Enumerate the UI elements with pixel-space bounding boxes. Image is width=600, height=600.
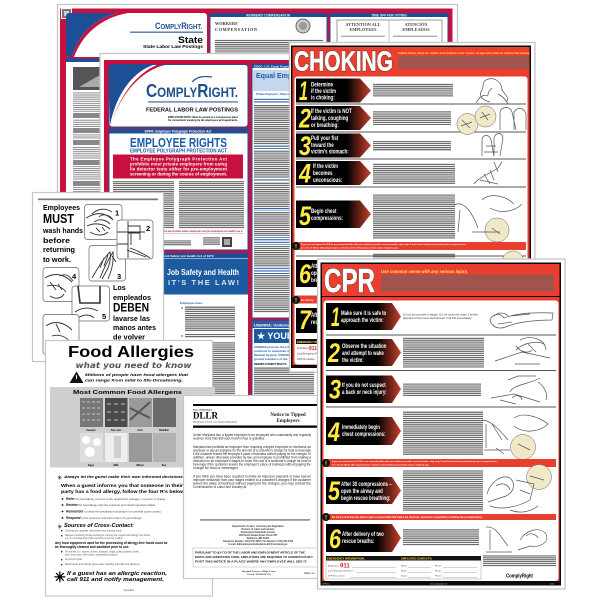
choking step 3: Pull your fist [311, 135, 338, 142]
notice body: employer or pay an assignee for the amount of a customer's charge for food or beverage [193, 448, 311, 452]
CPR emergency information: 911 [340, 564, 350, 570]
poster: employees must wash hands [32, 192, 164, 362]
department contact: Department of Labor, Licensing and Regulation [232, 525, 284, 528]
State left column [66, 58, 106, 194]
Workers' compensation panel [210, 13, 327, 134]
posting requirement box [193, 548, 328, 567]
Equal employment panel: EEOC: U.S. Equal Employment [254, 64, 298, 68]
department contact [223, 525, 294, 546]
cross-contact section: Wash hands and change gloves after handling potential food allergens. [65, 563, 140, 566]
Time off for voting panel: EMPLOYEES [350, 27, 377, 32]
CPR emergency information: Phone: [435, 566, 442, 568]
CPR step dividers [326, 335, 556, 407]
notice body: Under Maryland law, a tipped employee is an employee who customarily and regularly [193, 433, 311, 437]
choking intro [398, 51, 530, 69]
USERRA panel: Medical System, USERRA also [254, 353, 298, 357]
State header panel: COMPLYRIGHT. [155, 21, 202, 31]
Equal employment panel [252, 64, 342, 318]
notice title [270, 413, 306, 424]
cross-contact section: be thoroughly cleaned and sanitized prior to use. [55, 545, 129, 549]
poster: CPR [318, 259, 565, 589]
Spanish notice text: empleados [113, 293, 151, 302]
EPPA QR code [222, 237, 232, 247]
choking emergency info: Ambulance: [297, 347, 309, 350]
allergen photos [80, 398, 176, 462]
Time off for voting panel: ATENCIÓN [405, 22, 428, 27]
wash step 1 [84, 204, 122, 240]
CPR emergency information: Local Emergency Phone #: [328, 570, 355, 572]
English notice text: returning [43, 245, 75, 254]
cross-contact section: Fryers and grills. [65, 558, 83, 561]
guest guidance: When a guest informs you that someone in their [61, 483, 183, 489]
Time off for voting panel [330, 13, 448, 134]
choking step 5: Begin chest [311, 208, 337, 215]
Job safety and health panel: IT'S THE LAW! [168, 278, 239, 287]
cross-contact section: All utensils (i.e. spoons, knives, spatulas, tongs, cutting boards, bowls, [65, 550, 140, 554]
CPR step 1: 1 [331, 302, 340, 332]
notice body: addition, unless otherwise provided by law, and employer is prohibited from making a [193, 456, 311, 460]
choking warning bar: at a rate of 100 to 120 compressions a minute until an 911 person arrives and is ready for you. [301, 246, 399, 250]
Spanish notice text: manos antes [113, 323, 156, 332]
poster: food allergies [46, 340, 215, 596]
cross-contact section: Any food equipment used for the processing of allergy-free foods must be [55, 541, 168, 545]
emergency callout [54, 569, 167, 585]
choking second warning: Do not try [301, 298, 314, 302]
department contact: E-mail: dldliemploymentstandards-dllr@maryland.gov [228, 543, 288, 546]
allergen labels: Milk [114, 464, 119, 467]
allergen labels: Shellfish [159, 429, 170, 432]
notice footer: Maryland Division of Wage & Hour [242, 570, 276, 573]
cross-contact section: Allergen-containing foods touching or coming into contact with allergy-free foods [65, 534, 151, 537]
department contact: Employment Standards Service [241, 531, 276, 534]
choking step 2: 2 [298, 104, 311, 134]
cross-contact section: Sources of Cross-Contact: [64, 523, 134, 529]
notice title: Employers [276, 419, 300, 424]
choking second warning: ! [295, 298, 297, 304]
choking emergency info: EMERGENCY INFORMATION: [297, 340, 333, 344]
allergen labels: Soy [162, 464, 167, 467]
choking step 6: breaths [311, 277, 327, 284]
CPR footer [322, 582, 554, 586]
CPR step 3: 3 [329, 374, 341, 404]
CPR footer: www.complyright.com [430, 582, 448, 586]
CPR step 3: a back or neck injury: [342, 389, 387, 396]
poster: State Labor Law Postings [58, 4, 458, 194]
most common allergens panel: Most Common Food Allergens [73, 390, 182, 396]
poster: notice to tipped employers [184, 396, 328, 578]
guest guidance [57, 474, 186, 495]
Equal employment panel: Equal Employment [256, 73, 320, 80]
four R's list: Review the food allergy with the customer and check ingredient labels. [66, 503, 156, 507]
wash step 1: 1 [115, 208, 119, 218]
CPR step 2: the victim: [342, 357, 364, 364]
subtitle: what you need to know [76, 361, 192, 370]
cross-contact section: Cooking oils, spatulas, and steam from cooking foods. [65, 530, 123, 532]
EPPA employee rights panel: EMPLOYEE RIGHTS [130, 135, 227, 150]
CPR step 5: 5 [328, 476, 341, 506]
posting requirement box: PURSUANT TO §3-713 OF THE LABOR AND EMPLOYMENT ARTICLE OF THE [195, 550, 305, 554]
choking step 7: rescue [311, 319, 326, 326]
emergency callout: ✳ [54, 569, 66, 585]
poster: choking [290, 42, 535, 372]
CPR step 2: Observe the situation [342, 343, 386, 350]
CPR ComplyRight logo: ComplyRight [506, 574, 533, 580]
allergen labels: Peanuts [86, 429, 96, 432]
CPR step 6: rescue breaths: [342, 538, 375, 545]
Time off for voting panel: TIME OFF FOR VOTING [371, 14, 407, 18]
choking step 3: victim's stomach: [311, 149, 349, 156]
department contact: Telephone Number: (410) 767-2357 | Fax Number: (410) 333-7303 [223, 540, 294, 543]
CPR warning bar 2: ! [325, 516, 327, 522]
CPR footer: 1234 [550, 584, 554, 586]
CPR step 4: Immediately begin [342, 424, 380, 431]
USERRA panel: positions to undertake military [254, 349, 298, 353]
State header panel: State [178, 35, 203, 45]
choking warning bar: ! [295, 244, 297, 250]
Time off for voting panel: EMPLEADOS [402, 27, 430, 32]
wash step 3: 3 [117, 272, 121, 281]
choking step 2: If the victim is NOT [311, 108, 352, 115]
choking step 1: is choking: [311, 95, 335, 102]
CPR emergency information: EMPLOYEE CONTACTS: [401, 556, 432, 560]
USERRA panel: ★ YOUR RIGHTS [257, 331, 330, 341]
English notice text: Employees [43, 203, 80, 212]
CPR step 4: chest compressions: [342, 431, 386, 438]
warning [70, 372, 189, 383]
cross-contact section: (i.e. a nut-containing muffin touching a nut-free muffin). [65, 537, 123, 540]
notice title: Notice to Tipped [270, 413, 306, 418]
CPR step 4: 4 [327, 417, 340, 447]
EPPA employee rights panel [109, 129, 248, 250]
CPR step 6: After delivery of two [342, 531, 384, 538]
notice body: receives more than $30 each month in tips or gratuities. [193, 436, 265, 440]
CPR emergency information: Name: [401, 570, 408, 572]
cross-contact section: pots, food pans, sheet pans, preparation surfaces. [65, 554, 118, 556]
choking step 3 [296, 131, 503, 161]
CPR step 1: appears to have been electrocuted. Call 911 immediately. [403, 317, 472, 320]
CPR step 1: approach the victim: [341, 317, 384, 324]
CPR step 2: 2 [327, 338, 340, 368]
Spanish notice text: lavarse las [113, 314, 150, 323]
USERRA panel: USERRA protects the job rights [254, 345, 299, 349]
allergen labels: Wheat [136, 464, 144, 467]
CPR emergency information: CPR Kit Location: [328, 574, 346, 578]
choking step 4: 4 [298, 158, 311, 188]
wash step 2: 2 [146, 224, 150, 233]
guest guidance: party has a food allergy, follow the four R's below: [61, 489, 186, 495]
most common allergens panel [50, 387, 215, 468]
EPPA employee rights panel: The law protects where employees and job applicants can readily see it. [163, 229, 243, 233]
choking step 1: Determine [311, 82, 333, 89]
CPR step 2: and attempt to wake [342, 350, 384, 357]
CPR footer: CPR0001 [322, 584, 330, 586]
USERRA panel: ground members of the [254, 357, 288, 361]
Time off for voting panel: ATTENTION ALL [345, 22, 381, 27]
notice body: charge for food or beverages. [193, 466, 239, 470]
choking second warning [292, 296, 526, 304]
choking title: CHOKING [294, 46, 393, 76]
Job safety and health panel [163, 253, 248, 398]
CPR warning bar 1: at a rate of 100 to 120 compressions a minute until an 911 person arrives and is ready for you. [332, 464, 430, 466]
notice footer [242, 570, 315, 576]
Workers' compensation panel: WORKERS' [215, 21, 239, 26]
choking step 7: After [311, 312, 322, 319]
Spanish notice text: de volver [113, 332, 145, 342]
CPR title: CPR [324, 262, 375, 299]
CPR emergency information: EMERGENCY INFORMATION: [327, 556, 365, 560]
ComplyRight federal header: COMPLYRIGHT. [146, 81, 238, 101]
CPR emergency information: Ambulance: [328, 564, 340, 568]
Spanish notice text: DEBEN [113, 300, 149, 314]
notice body: if the customer leaves the employer's place of business without paying for the charges. In [193, 452, 311, 456]
emergency callout: call 911 and notify management. [67, 577, 164, 583]
notice body: If you think you have been required to make an improper payment or have had an [193, 474, 311, 478]
USERRA panel [252, 321, 342, 401]
CPR step 3 [326, 374, 547, 404]
ComplyRight federal header: for convenient viewing by all employees and applicants. [168, 119, 238, 122]
State QR code [61, 8, 72, 19]
notice body: Commissioner of Labor and Industry at: [193, 485, 247, 489]
EPPA employee rights panel: EPPA: Employee Polygraph Protection Act [145, 130, 212, 134]
wash step 2 [117, 220, 153, 259]
Job safety and health panel: Job Safety and Health [167, 267, 239, 277]
CPR emergency information: Phone: [435, 576, 442, 578]
ComplyRight federal header: EMPLOYERS NOTE: Must be posted in a conspicuous place [168, 116, 239, 119]
posting requirement box: MARYLAND ANNOTATED CODE, EMPLOYERS ARE REQUIRED TO CONSPICUOUSLY [195, 555, 313, 559]
Workers' compensation panel: WORKERS' COMPENSATION [246, 14, 291, 18]
wash step 5: 5 [102, 312, 106, 321]
choking step 4: If the victim [313, 163, 338, 170]
EPPA employee rights panel: prohibits most private employers from using [130, 162, 227, 166]
notice footer: DWR-P-1.0 [304, 573, 315, 575]
choking step 2: talking, coughing [311, 115, 348, 122]
choking step 2 [296, 104, 526, 134]
USERRA panel: USERRA: Uniformed Services [254, 322, 312, 328]
choking step 6 [296, 251, 524, 289]
cross-contact section: ✳ [57, 523, 63, 531]
wash step 4 [43, 268, 79, 302]
choking step 6: open [311, 270, 322, 277]
guest guidance: ✳ [57, 474, 63, 482]
four R's list: Remember to check the preparation procedure for potential cross-contact. [66, 510, 161, 514]
choking warning bar [292, 242, 526, 250]
food poster footer: Speedline [124, 589, 135, 592]
choking emergency info: Local Emergency Phone #: [297, 352, 325, 356]
choking step dividers [296, 104, 526, 256]
choking step 1: if the victim [311, 88, 336, 95]
CPR step 4 [326, 411, 548, 460]
notice body: Maryland law prohibits an employer from requiring a tipped employee to reimburse an [193, 445, 311, 449]
choking step 3: 3 [299, 131, 311, 161]
choking warning bar: If you are not trained in CPR or are uncomfortable with your ability to provide rescue breaths, skip steps 5 and 6 and continue performing chest compressions [301, 243, 466, 246]
English notice text: to work. [43, 255, 71, 264]
choking title: CHOKING [294, 46, 393, 76]
CPR emergency information: Name: [401, 566, 408, 568]
DLLR logo: DLLR [193, 410, 219, 420]
wash step 4: 4 [72, 272, 77, 281]
department contact: Baltimore, MD 21201 [247, 537, 270, 540]
four R's list: Refer the food allergy concern to the department manager, or person in charge. [66, 497, 166, 501]
CPR warning bar 1: ! [325, 462, 327, 468]
EPPA employee rights panel: EMPLOYEE POLYGRAPH PROTECTION ACT [130, 148, 227, 154]
allergen labels: Eggs [88, 464, 95, 467]
department contact: 1100 North Eutaw Street, Room 607 [239, 534, 278, 537]
CPR step 5: After 30 compressions – [341, 481, 392, 488]
notice body: leaves the place of business without paying for the charges, you may contact the [193, 482, 311, 486]
CPR step 2 [326, 337, 550, 368]
EPPA employee rights panel: The Employee Polygraph Protection Act [130, 156, 228, 162]
choking step 6: 6 [299, 259, 312, 289]
wash step 6 [43, 314, 79, 354]
CPR warning bar 2 [322, 513, 556, 522]
CPR step 6: 6 [329, 524, 342, 554]
State header panel [66, 13, 207, 57]
choking step 7 [296, 305, 371, 335]
notice body [193, 433, 312, 489]
choking emergency info [296, 339, 476, 361]
English notice text: before [43, 236, 70, 245]
choking step 7: 7 [299, 305, 313, 335]
wash step 3 [89, 246, 126, 281]
department contact: Division of Labor and Industry [241, 528, 275, 531]
choking step 2: or breathing: [311, 122, 339, 129]
posting requirement box: POST THIS NOTICE IN A PLACE WHERE ANY EMPLOYEE WILL SEE IT. [195, 560, 307, 564]
EPPA employee rights panel: screening or during the course of employment. [130, 172, 227, 176]
choking step 3: toward the [311, 142, 334, 149]
warning: can range from mild to life-threatening. [85, 378, 183, 382]
EPPA employee rights panel: lie detector tests either for pre-employment [130, 166, 228, 172]
choking step 4 [296, 158, 502, 188]
wash step 5 [72, 286, 110, 321]
CPR step 1: Make sure it is safe to [341, 310, 387, 317]
CPR emergency information: Phone: [435, 570, 442, 572]
notice footer: Posted: 10/12/2014 V1.0 [247, 573, 272, 576]
choking step 6: Attempt [311, 263, 328, 270]
CPR intro [381, 269, 554, 292]
food allergies title: Food Allergies [68, 344, 194, 361]
Workers' compensation panel: COMPENSATION [215, 27, 258, 32]
emergency callout: If a guest has an allergic reaction, [67, 571, 167, 577]
ComplyRight federal header: FEDERAL LABOR LAW POSTINGS [146, 108, 238, 114]
CPR warning bar 1: If you are not trained in CPR or are uncomfortable with your ability to provide rescue breaths, skip steps 5 and 6 and continue performing chest compressions [332, 460, 497, 463]
allergen labels: Fish [138, 429, 143, 432]
Spanish notice text: Los [113, 283, 126, 292]
poster: Federal Labor Law Postings [100, 54, 342, 401]
Equal employment panel: Private Employers, State and Local [256, 92, 300, 96]
choking step 1 [296, 76, 508, 106]
DLLR logo: Department of Labor, Licensing and Regulation [193, 420, 238, 424]
English notice text: wash hands [42, 226, 83, 235]
choking step 4: becomes [313, 170, 333, 177]
warning: Millions of people have food allergies that [85, 372, 189, 377]
DLLR logo [193, 408, 238, 424]
CPR intro: Use common sense with any serious injury. [381, 269, 468, 274]
ComplyRight federal header [109, 64, 248, 127]
CPR step 6 [326, 524, 547, 554]
choking step 5 [296, 194, 522, 242]
English notice text [42, 203, 83, 264]
CPR step 5: begin rescue breathing: [341, 495, 390, 502]
CPR step 5 [326, 464, 552, 512]
choking emergency info: CPR Kit Location: [297, 358, 315, 361]
notice body: improper deduction from your wages related to a customer's charges if the customer [193, 478, 312, 482]
four R's list: Respond to the customer and inform them of your findings. [66, 516, 142, 520]
CPR title: CPR [324, 262, 375, 299]
choking intro: Follow these steps for adults and children over 1 years of age who have an obstructed airway. [398, 51, 530, 55]
CPR emergency information [326, 556, 481, 579]
allergen labels [86, 429, 170, 467]
Spanish notice text [113, 283, 156, 342]
choking step 5: compressions: [311, 215, 343, 222]
CPR step 1: Do not put yourself in danger. Do not touch the victim if he/she [403, 314, 479, 316]
USERRA panel: REEMPLOYMENT RIGHTS [254, 362, 287, 366]
CPR step 5: open the airway and [341, 488, 383, 495]
notice body: deduction to an employee's wages to cover the cost of a customer's charge for food or [193, 459, 312, 463]
CPR step 1 [326, 302, 553, 332]
cross-contact section [55, 523, 168, 566]
allergen labels: Tree nuts [111, 429, 122, 432]
State header panel: State Labor Law Postings [143, 44, 204, 49]
Job safety and health panel: Job Safety and Health Act of 1970 [164, 254, 214, 258]
CPR warning bar 2: Do not try more than two times to give a rescue breath that makes the chest rise, because it is important to continue chest compressions. [332, 516, 483, 519]
CPR emergency information: Name: [401, 576, 408, 578]
four R's list [62, 497, 166, 520]
English notice text: MUST [43, 211, 74, 226]
choking step 5: 5 [299, 201, 312, 231]
choking step 4: unconscious: [313, 177, 342, 184]
guest guidance: Always let the guest make their own informed decisions. [63, 475, 184, 479]
notice body: beverage if the customer leaves the employer's place of business without paying the [193, 462, 311, 466]
Job safety and health panel: Employees have: [180, 301, 203, 305]
CPR warning bar 1 [322, 459, 556, 468]
CPR disclaimer [483, 555, 556, 567]
DLLR logo: State of Maryland [193, 408, 212, 412]
CPR step 3: If you do not suspect [342, 382, 386, 389]
choking emergency info: 911 [309, 346, 317, 352]
choking step 1: 1 [299, 76, 308, 106]
